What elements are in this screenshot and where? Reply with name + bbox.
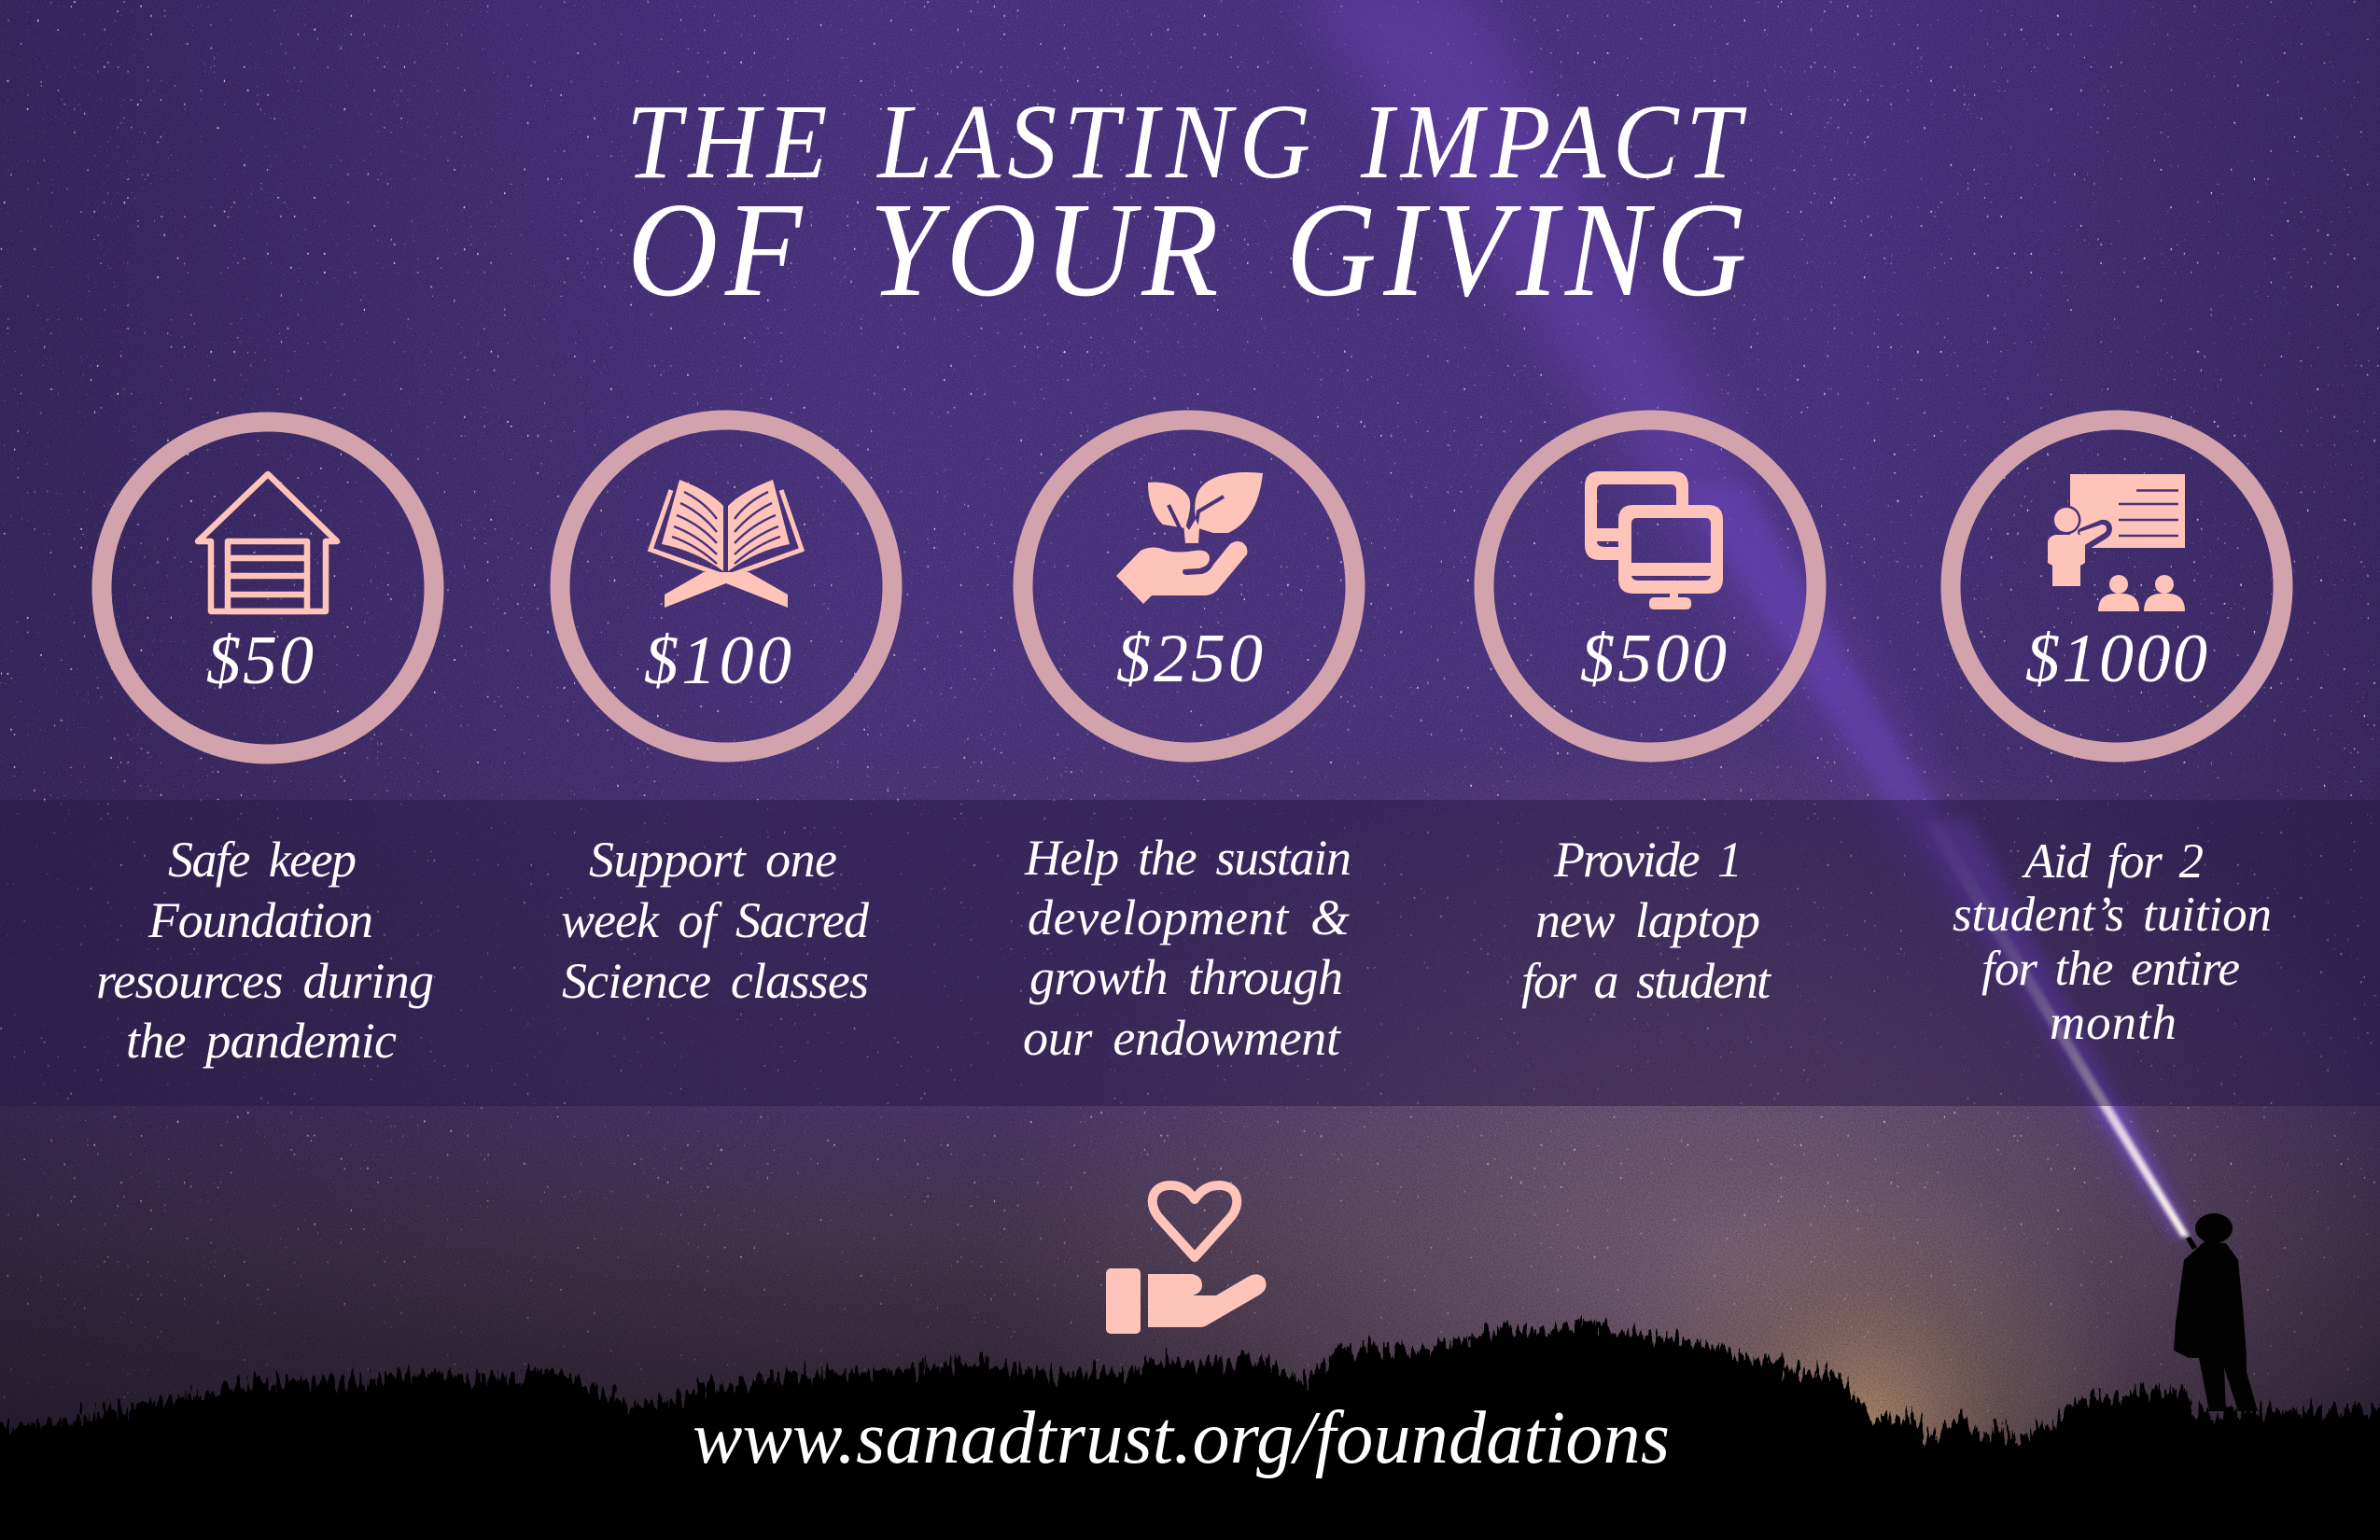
icon: open book on stand	[651, 480, 802, 608]
amount: $50	[206, 623, 314, 699]
text block: $100 description	[561, 832, 870, 1009]
panel: $1000	[1951, 420, 2283, 752]
icon: garage	[198, 474, 337, 611]
text block: $100 description: Support one	[589, 832, 837, 888]
panel: $250	[1023, 420, 1355, 752]
amount: $100	[644, 623, 791, 699]
icon: computer screens	[1585, 471, 1723, 609]
icon: heart over open hand	[1106, 1185, 1267, 1334]
title: THE LASTING IMPACT	[626, 83, 1747, 201]
text block: $1000 description: month	[2050, 996, 2177, 1050]
text block: $50 description: Safe keep	[168, 832, 357, 888]
ring	[1023, 420, 1355, 752]
text block: $500 description: for a student	[1521, 953, 1772, 1009]
ring	[1484, 420, 1816, 752]
text block: $250 description: development &	[1028, 889, 1350, 945]
person silhouette with flashlight	[2174, 1213, 2258, 1411]
ring	[560, 420, 892, 752]
icon: teacher with students	[2048, 474, 2185, 611]
icon: plant in hand	[1116, 472, 1263, 604]
text block: $250 description: growth through	[1029, 949, 1343, 1005]
panel: $500	[1484, 420, 1816, 752]
panel: $50	[102, 422, 434, 754]
amount: $1000	[2025, 621, 2207, 697]
text block: $100 description: week of Sacred	[561, 892, 870, 948]
treeline silhouette	[0, 1323, 2380, 1540]
flashlight beam	[1293, 0, 2190, 1237]
title	[626, 83, 1747, 325]
text block: $250 description	[1023, 830, 1351, 1066]
text block: $1000 description: for the entire	[1981, 942, 2240, 996]
panel: $100	[560, 420, 892, 752]
text block: $50 description: the pandemic	[126, 1013, 397, 1069]
text block: $250 description: Help the sustain	[1024, 830, 1351, 886]
translucent text band	[0, 800, 2380, 1106]
amount: $250	[1116, 621, 1263, 697]
text block: $1000 description	[1953, 834, 2272, 1050]
text block: $50 description	[96, 832, 434, 1069]
text block: $100 description: Science classes	[562, 953, 869, 1009]
text block: $50 description: Foundation	[147, 892, 373, 948]
text block: $500 description: new laptop	[1535, 892, 1760, 948]
ring	[1951, 420, 2283, 752]
text block: $1000 description: Aid for 2	[2022, 834, 2204, 889]
title: OF YOUR GIVING	[627, 175, 1747, 325]
text block: $1000 description: student’s tuition	[1953, 888, 2272, 942]
text block: $500 description	[1521, 832, 1772, 1009]
text block: $50 description: resources during	[96, 953, 434, 1009]
ring	[102, 422, 434, 754]
text block: $500 description: Provide 1	[1553, 832, 1743, 888]
amount: $500	[1580, 621, 1727, 697]
website url: www.sanadtrust.org/foundations	[693, 1397, 1670, 1479]
text block: $250 description: our endowment	[1023, 1010, 1342, 1066]
